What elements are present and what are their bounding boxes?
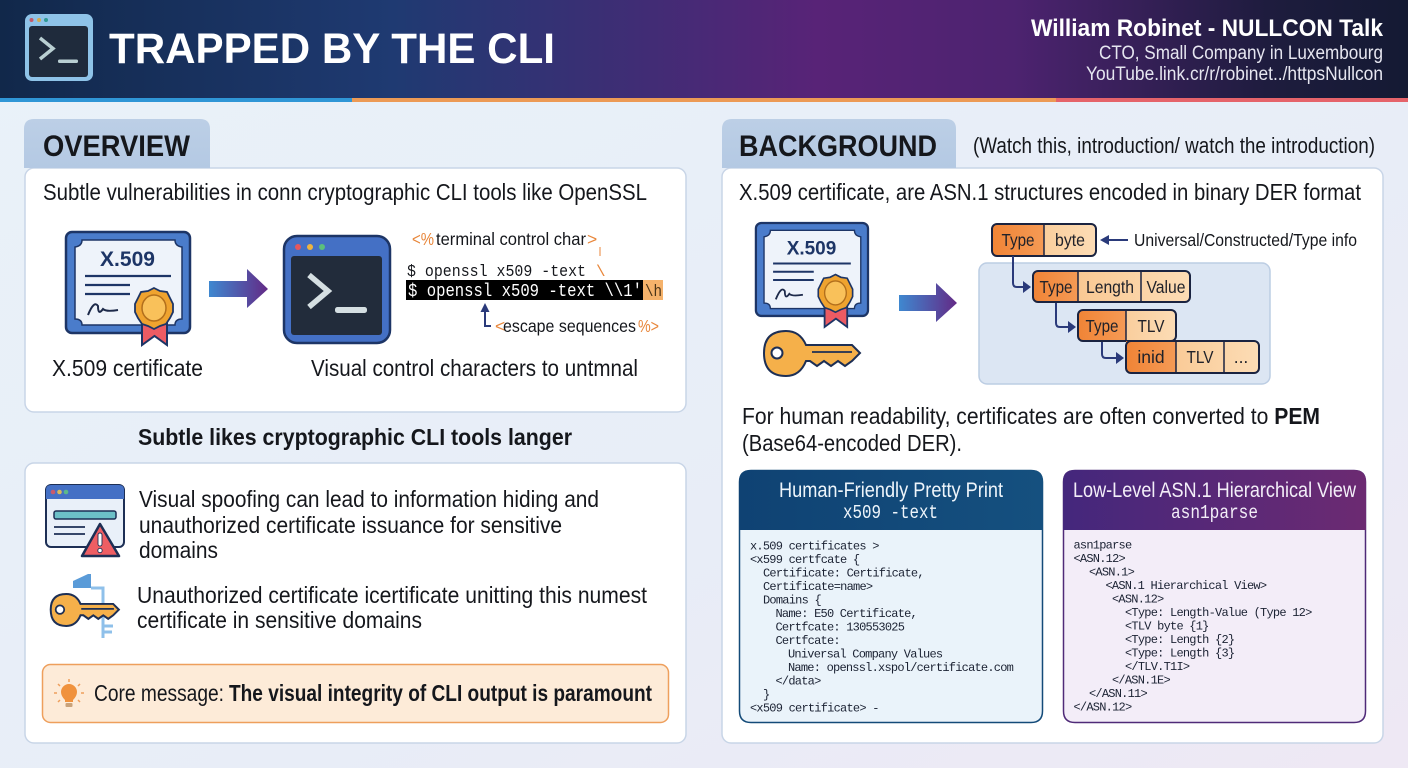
diagram: nested TLV structure xyxy=(979,224,1357,384)
code card: x509 -text: Certfcate: 130553025 xyxy=(776,620,905,634)
panel: risks xyxy=(25,463,686,743)
row: type byte: Type xyxy=(1002,230,1034,250)
row: type length value: Type xyxy=(1040,277,1072,297)
panel: background xyxy=(722,119,1383,743)
callout: core message xyxy=(42,664,668,722)
row: type TLV: TLV xyxy=(1138,316,1165,336)
code card: asn1parse: Low-Level ASN.1 Hierarchical View xyxy=(1073,479,1357,502)
PEM explanation: (Base64-encoded DER). xyxy=(742,430,962,456)
code card: asn1parse: asn1parse xyxy=(1171,502,1258,524)
background tab: BACKGROUND xyxy=(739,130,937,163)
mid heading: Subtle likes cryptographic CLI tools langer xyxy=(138,424,572,450)
speaker info xyxy=(1031,15,1383,85)
code card: x509 -text: </data> xyxy=(776,674,821,688)
caption: certificate: X.509 certificate xyxy=(52,355,203,381)
row: type TLV: Type xyxy=(1086,316,1118,336)
code card: x509 -text: Certificate=name> xyxy=(763,580,873,594)
code card: x509 -text: Name: E50 Certificate, xyxy=(776,607,917,621)
callout: core message: The visual integrity of CLI output is paramount xyxy=(229,680,652,706)
PEM explanation: For human readability, certificates are often converted to PEM xyxy=(742,403,1320,429)
code card: x509 -text: x.509 certificates > xyxy=(750,540,879,554)
arrow: certificate to TLV xyxy=(899,283,957,322)
code card: x509 -text xyxy=(739,470,1043,722)
icon: X.509 certificate small xyxy=(756,223,868,327)
speaker info: CTO, Small Company in Luxembourg xyxy=(1099,43,1383,64)
arrow: certificate to terminal xyxy=(209,269,268,308)
code card: asn1parse: <TLV byte {1} xyxy=(1125,620,1209,634)
code card: x509 -text: Certificate: Certificate, xyxy=(763,566,924,580)
terminal spoofing example: <% xyxy=(412,229,434,249)
code card: asn1parse: <ASN.1> xyxy=(1089,566,1135,580)
TLV connector arrows xyxy=(1013,256,1117,358)
code card: x509 -text: Universal Company Values xyxy=(788,648,943,662)
code card: x509 -text: Domains { xyxy=(763,594,821,608)
code card: x509 -text: x509 -text xyxy=(843,502,938,524)
terminal spoofing example xyxy=(406,229,663,336)
terminal spoofing example: > xyxy=(587,229,597,249)
terminal spoofing example: $ openssl x509 -text \\1' xyxy=(408,282,642,302)
code card: asn1parse: <Type: Length {3} xyxy=(1125,646,1234,660)
terminal spoofing example: %> xyxy=(638,316,659,336)
speaker info: William Robinet - NULLCON Talk xyxy=(1031,15,1383,42)
risk text: visual spoofing: unauthorized certificate issuance for sensitive xyxy=(139,512,562,538)
code card: asn1parse: <Type: Length {2} xyxy=(1125,633,1234,647)
terminal spoofing example: escape sequences xyxy=(503,316,636,336)
overview tab xyxy=(24,119,210,168)
row: type length value xyxy=(1033,271,1190,302)
header banner xyxy=(0,0,1408,102)
risk text: visual spoofing: Visual spoofing can lead to information hiding and xyxy=(139,486,599,512)
code card: asn1parse: <Type: Length-Value (Type 12> xyxy=(1125,606,1312,620)
row: type length value: Length xyxy=(1086,277,1134,297)
icon: terminal window xyxy=(284,236,390,343)
icon: X.509 certificate small: X.509 xyxy=(787,238,836,259)
code card: asn1parse: </ASN.12> xyxy=(1074,700,1132,714)
icon: window warning xyxy=(46,485,124,556)
icon: X.509 certificate xyxy=(66,232,190,345)
terminal spoofing example: \ xyxy=(596,263,606,281)
row: inid TLV: inid xyxy=(1137,347,1165,367)
terminal spoofing example: < xyxy=(495,316,505,336)
row: inid TLV: TLV xyxy=(1186,347,1214,367)
risk text: unauthorized certificate: certificate in sensitive domains xyxy=(137,607,422,633)
row: inid TLV: ... xyxy=(1234,347,1248,367)
code card: x509 -text: Human-Friendly Pretty Print xyxy=(779,479,1003,502)
code card: x509 -text: <x599 certfcate { xyxy=(750,553,860,567)
risk text: visual spoofing xyxy=(139,486,599,563)
row: type length value: Value xyxy=(1146,277,1186,297)
code card: x509 -text: <x509 certificate> - xyxy=(750,702,879,716)
row: inid TLV xyxy=(1126,341,1259,373)
caption: terminal: Visual control characters to untmnal xyxy=(311,355,638,381)
code card: asn1parse: </TLV.T1I> xyxy=(1125,660,1190,674)
code card: x509 -text: Certfcate: xyxy=(776,634,840,648)
overview intro text: Subtle vulnerabilities in conn cryptographic CLI tools like OpenSSL xyxy=(43,179,647,205)
code card: asn1parse: <ASN.12> xyxy=(1074,552,1126,566)
risk text: unauthorized certificate: Unauthorized certificate icertificate unitting this numest xyxy=(137,582,648,608)
code card: x509 -text: } xyxy=(763,688,769,702)
risk text: visual spoofing: domains xyxy=(139,537,218,563)
arrow and label: type info: Universal/Constructed/Type info xyxy=(1134,230,1357,250)
code card: asn1parse: </ASN.11> xyxy=(1089,687,1147,701)
code card: asn1parse xyxy=(1063,470,1366,722)
code card: x509 -text: Name: openssl.xspol/certificate.com xyxy=(788,661,1014,675)
code card: asn1parse: asn1parse xyxy=(1074,538,1132,552)
code card: asn1parse: <ASN.1 Hierarchical View> xyxy=(1106,579,1267,593)
row: type TLV xyxy=(1078,310,1176,341)
icon: key xyxy=(764,331,860,376)
terminal spoofing example: terminal control char xyxy=(436,229,586,249)
icon: terminal logo xyxy=(25,14,93,81)
row: type byte: byte xyxy=(1055,230,1085,250)
speaker info: YouTube.link.cr/r/robinet../httpsNullcon xyxy=(1086,64,1383,85)
panel: overview xyxy=(24,119,686,412)
title: TRAPPED BY THE CLI xyxy=(109,25,555,73)
callout: core message: Core message: xyxy=(94,680,224,706)
terminal spoofing example: \h xyxy=(645,283,662,302)
icon: X.509 certificate: X.509 xyxy=(100,248,155,271)
icon: light bulb xyxy=(54,679,84,707)
risk text: unauthorized certificate xyxy=(137,582,648,633)
background tab xyxy=(722,119,956,168)
icon: key with branch xyxy=(51,574,119,638)
row: type byte xyxy=(992,224,1096,256)
code card: asn1parse: <ASN.12> xyxy=(1112,592,1164,606)
overview tab: OVERVIEW xyxy=(43,130,191,163)
PEM explanation xyxy=(742,403,1320,456)
code card: asn1parse: </ASN.1E> xyxy=(1112,674,1170,688)
terminal spoofing example: $ openssl x509 -text xyxy=(407,263,586,282)
